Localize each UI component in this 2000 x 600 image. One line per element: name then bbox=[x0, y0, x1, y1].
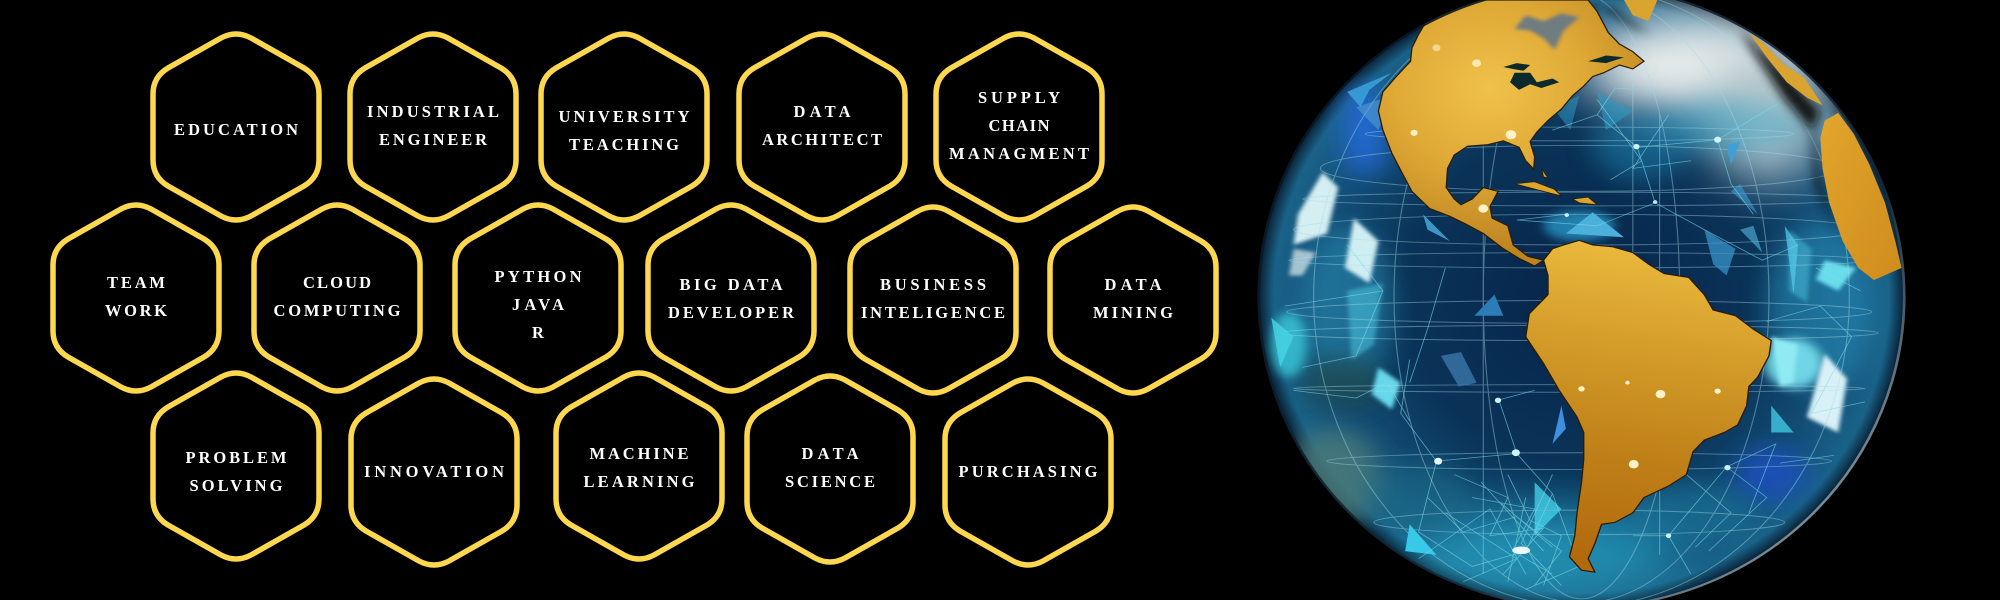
continent: europe bbox=[1624, 0, 1823, 105]
hexagon: data science bbox=[747, 376, 913, 562]
hexagon: machine learning: LEARNING bbox=[584, 472, 695, 491]
hexagon: machine learning bbox=[556, 373, 722, 559]
globe rim bbox=[1259, 0, 1904, 600]
hexagon: business inteligence bbox=[850, 207, 1016, 393]
hexagon: purchasing bbox=[945, 379, 1111, 565]
hexagon: industrial engineer bbox=[350, 34, 516, 220]
globe illustration bbox=[1258, 0, 1905, 600]
hexagon: big data developer: BIG DATA bbox=[680, 275, 783, 294]
hexagon: purchasing: PURCHASING bbox=[958, 462, 1098, 481]
hexagon: industrial engineer: INDUSTRIAL bbox=[367, 102, 499, 121]
hexagon: data architect: ARCHITECT bbox=[762, 130, 882, 149]
hexagon: python java r: JAVA bbox=[512, 295, 564, 314]
hexagon: big data developer: DEVELOPER bbox=[668, 303, 795, 322]
hexagon: big data developer bbox=[648, 205, 814, 391]
hexagon: data architect: DATA bbox=[794, 102, 851, 121]
hexagon: data science: SCIENCE bbox=[785, 472, 875, 491]
hexagon: supply chain managment: MANAGMENT bbox=[949, 144, 1089, 163]
city lights bbox=[1411, 44, 1731, 554]
continent: caribbean islands bbox=[1515, 168, 1597, 205]
hexagon: problem solving bbox=[153, 373, 319, 559]
hexagon: python java r: PYTHON bbox=[494, 267, 582, 286]
latitude and longitude grid bbox=[1280, 0, 1878, 600]
hexagon: education bbox=[153, 34, 319, 220]
continent: great lakes bbox=[1503, 55, 1624, 90]
hexagon: team work: WORK bbox=[105, 301, 167, 320]
hexagon: university teaching bbox=[541, 34, 707, 220]
hexagon: team work: TEAM bbox=[107, 273, 165, 292]
hexagon: industrial engineer: ENGINEER bbox=[379, 130, 488, 149]
hexagon: supply chain managment bbox=[936, 34, 1102, 220]
hexagon: business inteligence: BUSINESS bbox=[880, 275, 986, 294]
hexagon: data science: DATA bbox=[802, 444, 859, 463]
hexagon: innovation: INNOVATION bbox=[364, 462, 504, 481]
hexagon: team work bbox=[53, 205, 219, 391]
hexagon: problem solving: SOLVING bbox=[190, 476, 283, 495]
continent: south america bbox=[1526, 240, 1771, 572]
continent shadows bbox=[1590, 0, 1838, 230]
continent: north america bbox=[1378, 0, 1644, 266]
hexagon: university teaching: UNIVERSITY bbox=[558, 107, 690, 126]
continent: africa bbox=[1820, 113, 1902, 280]
hexagon: supply chain managment: SUPPLY bbox=[978, 88, 1060, 107]
hexagon: innovation bbox=[351, 379, 517, 565]
hexagon: problem solving: PROBLEM bbox=[186, 448, 287, 467]
hexagon: cloud computing: CLOUD bbox=[303, 273, 371, 292]
hexagon: cloud computing bbox=[254, 205, 420, 391]
hexagon: supply chain managment: CHAIN bbox=[988, 116, 1050, 135]
hexagon: cloud computing: COMPUTING bbox=[274, 301, 401, 320]
soft colour patches bbox=[1271, 15, 1874, 593]
hexagon: business inteligence: INTELIGENCE bbox=[861, 303, 1005, 322]
continent: hudson bay bbox=[1515, 13, 1579, 50]
network triangles bbox=[1271, 73, 1798, 555]
hexagon: education: EDUCATION bbox=[174, 120, 298, 139]
hexagon: data architect bbox=[739, 34, 905, 220]
hexagon: university teaching: TEACHING bbox=[569, 135, 679, 154]
hexagon: python java r: R bbox=[532, 323, 545, 342]
bright crystal facets bbox=[1289, 172, 1856, 432]
hexagon: machine learning: MACHINE bbox=[590, 444, 688, 463]
hexagon: data mining bbox=[1050, 207, 1216, 393]
hexagon: data mining: DATA bbox=[1104, 275, 1162, 294]
hexagon: data mining: MINING bbox=[1093, 303, 1173, 322]
network lines bbox=[1285, 88, 1865, 589]
hexagon: python java r bbox=[455, 205, 621, 391]
